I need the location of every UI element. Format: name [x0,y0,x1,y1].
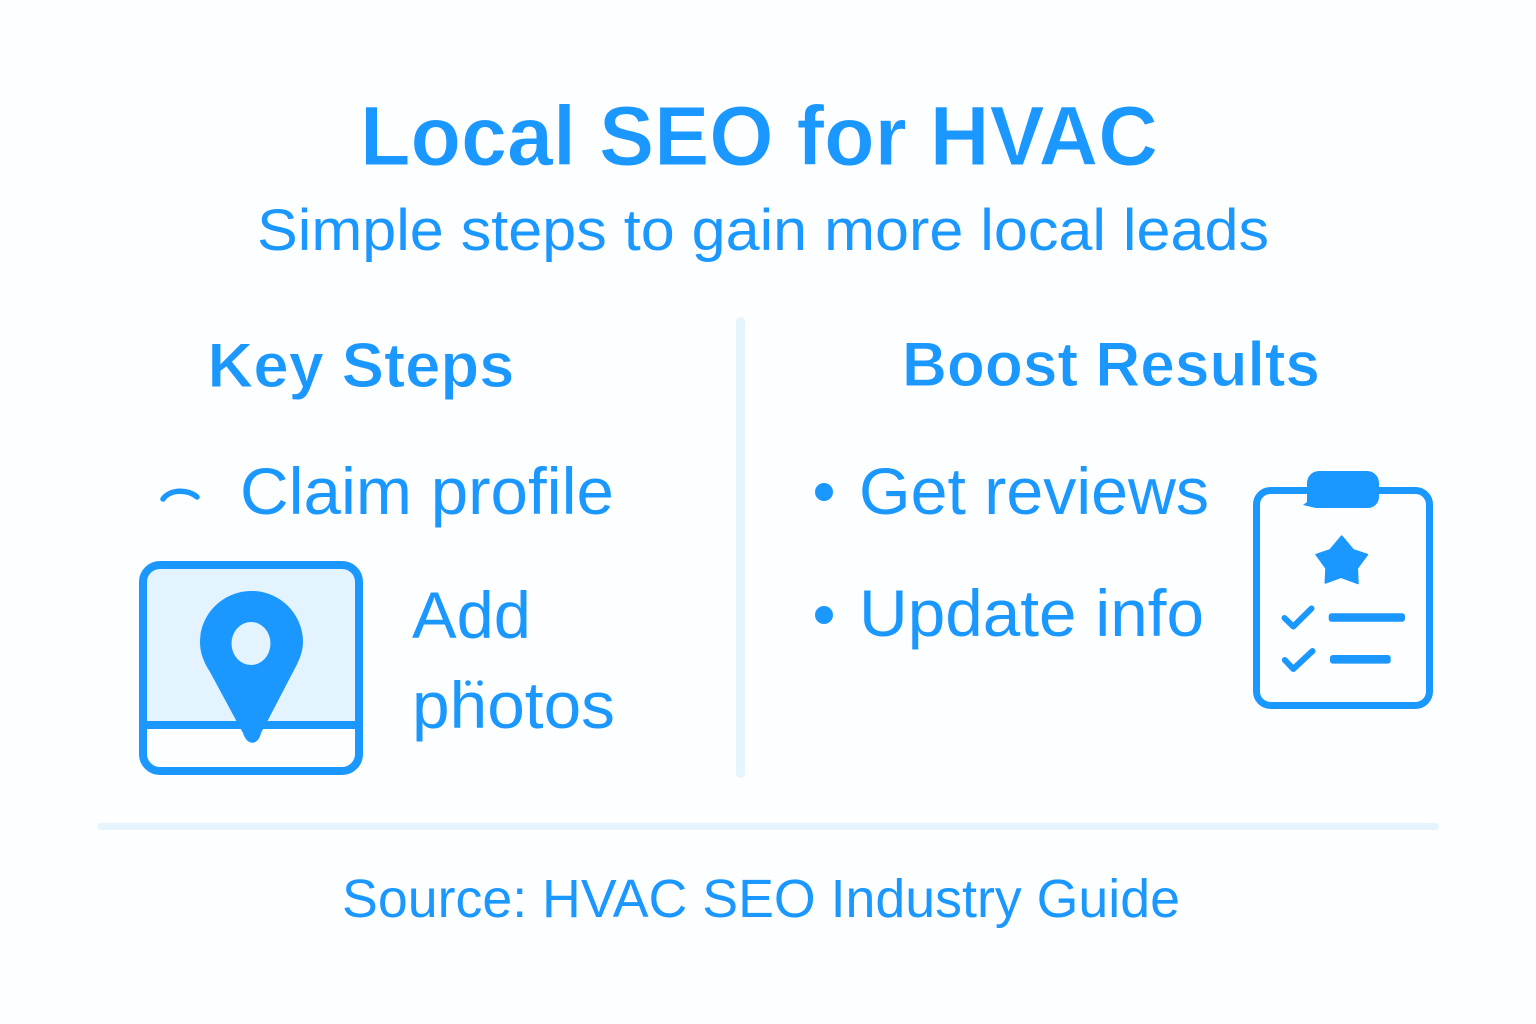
heading: boost results: Boost Results [902,330,1320,400]
subtitle: Simple steps to gain more local leads [257,198,1269,263]
heading: key steps: Key Steps [208,331,514,401]
step: add photos [412,578,615,742]
icon: map pin photo [143,565,359,771]
source note: Source: HVAC SEO Industry Guide [342,869,1180,929]
icon: small arc [163,491,197,499]
bullet: update info: Update info [859,576,1204,650]
title: Local SEO for HVAC [360,89,1158,183]
vertical divider [736,317,745,778]
step: add photos: photos [412,668,615,742]
bullet: get reviews: Get reviews [859,454,1209,528]
step: claim profile: Claim profile [240,454,614,528]
horizontal divider [97,823,1439,830]
step: add photos: Add [412,578,531,652]
icon: clipboard checklist [1256,471,1430,706]
